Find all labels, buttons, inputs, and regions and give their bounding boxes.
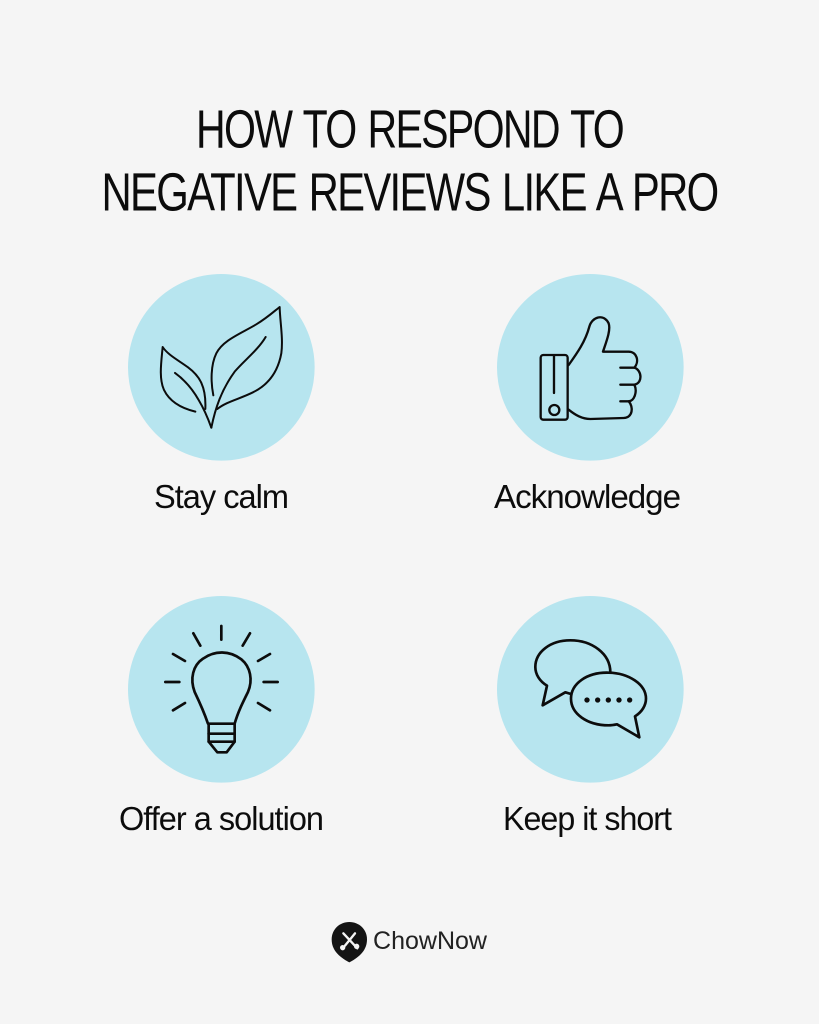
icon: light bulb in circle [128,596,315,783]
title: HOW TO RESPOND TO [196,100,623,160]
wordmark: ChowNow [373,927,488,955]
label: stay calm: Stay calm [154,478,288,515]
panel: acknowledge [494,274,684,515]
panel: stay calm [128,274,315,515]
icon: speech bubbles in circle [497,596,684,783]
label: offer a solution: Offer a solution [119,800,323,837]
panel: offer a solution [119,596,323,837]
label: keep it short: Keep it short [503,800,672,837]
logo: ChowNow [332,922,488,962]
icon: logo pin [332,922,367,962]
label: acknowledge: Acknowledge [494,478,680,515]
title [102,100,718,222]
icon: thumbs up in circle [497,274,684,461]
panel: keep it short [497,596,684,837]
icon: leaves in circle [128,274,315,461]
